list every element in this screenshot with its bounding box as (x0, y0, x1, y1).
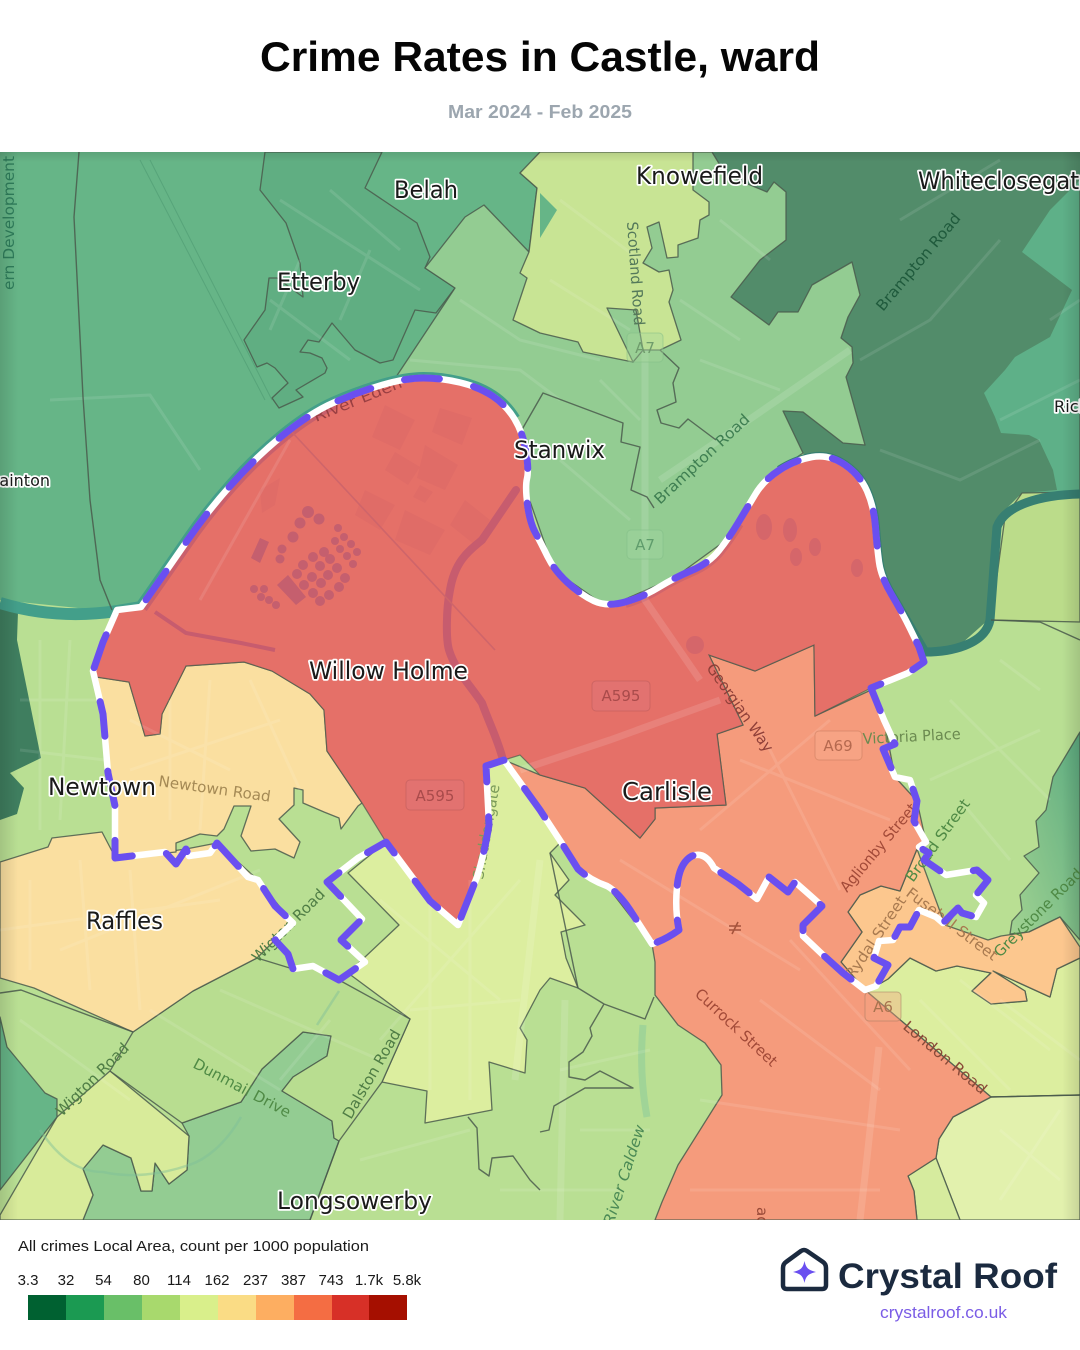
road labels: Brampton Road (650, 410, 753, 508)
area: Knowefield yellow green (513, 152, 709, 362)
area: pale orange Fusehill (841, 849, 1080, 1004)
icon: house with star (783, 1250, 826, 1289)
area: south-west darker green (0, 1017, 57, 1190)
road shields: A6 (873, 998, 893, 1016)
map vignette (0, 152, 1080, 1220)
area: south-east pale yellow (865, 958, 1080, 1097)
area: Wigton darker pale green (110, 958, 410, 1141)
place labels: Stanwix (514, 436, 605, 464)
place labels: Raffles (86, 907, 163, 935)
legend title: All crimes Local Area, count per 1000 population (18, 1238, 369, 1255)
subtitle: date range: Mar 2024 - Feb 2025 (448, 101, 632, 122)
road labels: Fusehill Street (903, 884, 1001, 964)
road labels: Brampton Road (872, 210, 964, 315)
place labels: Newtown (48, 773, 156, 801)
red area details: warehouses (260, 405, 490, 555)
place labels: Knowefield (636, 162, 763, 190)
road labels: Shaddongate (469, 783, 504, 881)
area: small green wedge (607, 308, 643, 362)
river: Caldew through red area (447, 490, 516, 760)
place labels: Carlisle (622, 777, 712, 806)
road labels: Georgian Way (703, 660, 777, 756)
legend scale values: 32 (58, 1272, 74, 1289)
logo: Crystal Roof (783, 1250, 1057, 1322)
base area: pale green (0, 453, 1080, 1220)
road shields (406, 333, 901, 1021)
legend scale values: 5.8k (393, 1272, 422, 1289)
legend scale values: 54 (95, 1272, 112, 1289)
road labels: Wigton Road (248, 885, 329, 966)
area: Denton Holme pale yellow (348, 760, 585, 1123)
road labels: Aglionby Street (836, 800, 921, 896)
road shields: A69 (823, 737, 853, 755)
legend scale values: 80 (133, 1272, 150, 1289)
area: salmon Currock and Botchergate (504, 645, 991, 1220)
area: north-west green (0, 152, 540, 608)
Castle ward boundary: white line (93, 378, 988, 990)
place labels: Belah (394, 176, 458, 204)
river: east teal band (780, 456, 1080, 652)
area: east green strip near Rickerby (991, 492, 1080, 622)
place labels (0, 162, 1080, 1215)
area: small green notch (540, 193, 557, 238)
area: far east green (984, 181, 1080, 496)
road labels: ad (753, 1207, 771, 1226)
area: south-east lower yellow (908, 1158, 960, 1220)
place labels: Longsowerby (277, 1187, 432, 1215)
road labels: Scotland Road (623, 221, 648, 326)
road labels: Wigton Road (52, 1039, 133, 1120)
area: Brampton dark green (700, 152, 1080, 655)
red area inner dark bank (141, 402, 738, 607)
area: Dunmail mid green (83, 1032, 339, 1220)
area: south-west yellow (0, 1071, 189, 1220)
area: far south-east pale blob (936, 1095, 1080, 1220)
area: Castle red north (93, 378, 924, 925)
river: Eden teal band (0, 378, 514, 614)
road labels: Newtown Road (157, 772, 272, 806)
railway through red area (290, 430, 495, 650)
road shields: A595 (602, 687, 640, 705)
road shields: A595 (416, 787, 454, 805)
area: Etterby green (244, 152, 455, 408)
area: east green gradient (1010, 732, 1080, 940)
railway through north-west green (140, 160, 272, 400)
road labels: Broad Street (902, 795, 974, 885)
road labels: London Road (899, 1017, 991, 1098)
road labels: Dalston Road (339, 1026, 404, 1122)
railway station icon (729, 922, 741, 934)
legend colour swatches (28, 1295, 407, 1320)
place labels: Willow Holme (309, 657, 468, 685)
road labels: Rydal Street (841, 892, 910, 982)
road labels (0, 156, 1080, 1227)
road network (0, 160, 1080, 1220)
title: Crime Rates in Castle, ward (260, 33, 820, 80)
red area details: tanks (250, 506, 361, 609)
area: Raffles cream (0, 832, 293, 1032)
road labels: Dunmail Drive (190, 1055, 294, 1121)
area: west dark green strip (0, 606, 41, 820)
Castle ward boundary: blue dashes (93, 378, 988, 990)
legend (18, 1238, 422, 1320)
area: Newtown cream (96, 662, 362, 858)
river: Dunmail channel (40, 991, 339, 1175)
legend scale values: 3.3 (18, 1272, 38, 1289)
road labels: ern Development (0, 156, 18, 290)
legend scale values: 387 (281, 1272, 306, 1289)
legend scale values: 743 (318, 1272, 344, 1289)
road labels: Currock Street (691, 985, 781, 1070)
area: Stanwix light green (396, 152, 865, 607)
legend scale values (18, 1272, 422, 1289)
river: Caldew south channel (642, 1025, 647, 1117)
river: minor channel in red area (155, 612, 275, 650)
road labels: River Caldew (600, 1122, 649, 1227)
road shields: A7 (635, 339, 655, 357)
legend scale values: 114 (167, 1272, 191, 1289)
legend scale values: 1.7k (355, 1272, 384, 1289)
road shields: A7 (635, 536, 655, 554)
ward outlines: extra boundaries (0, 152, 1080, 1220)
red area details: wooded patches east (686, 514, 863, 654)
legend scale values: 237 (243, 1272, 268, 1289)
logo wordmark: Crystal Roof (838, 1257, 1057, 1296)
logo url: crystalroof.co.uk (880, 1304, 1008, 1322)
road labels: River Eden (311, 374, 405, 426)
legend scale values: 162 (204, 1272, 230, 1289)
map panel (0, 152, 1080, 1227)
place labels: Etterby (277, 268, 360, 296)
road labels: Victoria Place (862, 725, 961, 748)
